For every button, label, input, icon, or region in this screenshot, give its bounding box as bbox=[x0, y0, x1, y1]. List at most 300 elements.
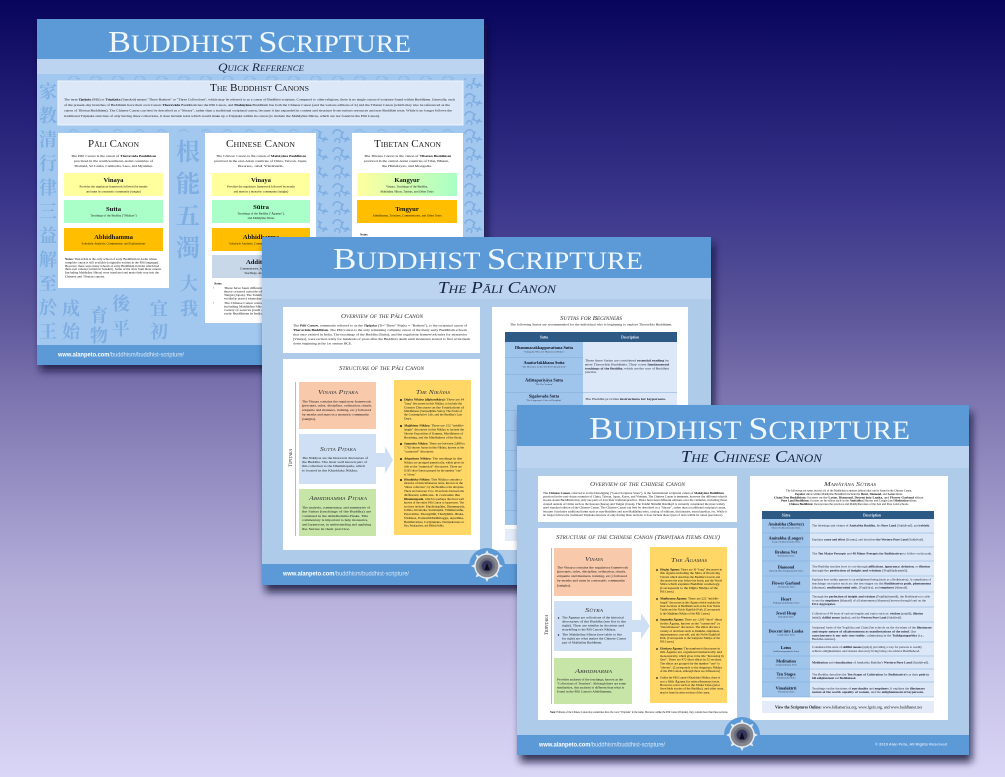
Dirgha Agama: this Āgama including the Sūtra of Practicing bbox=[660, 570, 720, 575]
heading: Chinese Canon bbox=[226, 139, 295, 150]
paragraph: in east-Asian Buddhism may only use parts of it in their tradition/practice. There have been different editions over the centuries, including those bbox=[543, 498, 728, 503]
box: Vinaya Pitaka: Vinaya Piṭaka bbox=[318, 390, 359, 396]
Samyutta Nikaya: Saṃyutta Nikāya: There are between 2,889 to bbox=[404, 442, 465, 446]
box: Kangyur: Kangyur bbox=[394, 177, 420, 184]
watermark: calligraphy columns: 大 bbox=[180, 270, 198, 296]
box: Vinaya: (saṅgha). bbox=[557, 584, 571, 588]
Dirgha Agama: Pāli Canon.) bbox=[660, 590, 674, 594]
box: Additional: Additional bbox=[246, 259, 276, 266]
intro: The following are some, but not all, of the Mahāyāna scriptures (sūtras) that can be found in the Chinese Canon. bbox=[786, 488, 912, 494]
poster: quick reference bbox=[37, 19, 487, 371]
paragraph: used standard edition of the Chinese Canon. The Chinese Canon can best be described as a "library", rather than a traditional scriptural canon, bbox=[543, 506, 726, 510]
table: "The Layperson's Code of Discipline" bbox=[526, 399, 562, 402]
paragraph bbox=[293, 324, 470, 346]
box: Vinaya: Provides the regulatory framework followed by monks bbox=[80, 184, 148, 188]
Samyukta Agama: Saṃyukta Āgama: There are 1,300 "short" sūtras bbox=[660, 616, 723, 622]
Khuddaka Nikaya: Khuddaka Nikāya: This Nikāya contains a bbox=[403, 478, 463, 482]
poster: the Chinese canon bbox=[517, 405, 972, 762]
notes label: Notes: bbox=[360, 232, 368, 236]
row: Diamond bbox=[769, 564, 930, 572]
row: Amitabha shorter: Shorter Sukhāvatīvyūha Sūtra bbox=[772, 527, 801, 530]
notes: complete canon is still available (originally written in the Pāli language). bbox=[65, 260, 159, 264]
notes: widely used standard edition of the canon. bbox=[224, 296, 304, 300]
description: The Tibetan Canon is the canon of Tibetan Buddhism bbox=[364, 154, 452, 158]
box: the Nikayas: The Nikāyas bbox=[416, 390, 450, 396]
Dirgha Agama: discourses the year before his death, and the World bbox=[660, 578, 722, 583]
notes: variety of sources (such as from Buddhist schools of bbox=[224, 308, 305, 312]
row: Diamond: Vajracchedikā Prajñāpāramitā Sūtra bbox=[769, 570, 804, 572]
box: Sutra: right). They are similar in doctrine and bbox=[562, 624, 624, 628]
row: Lotus: Considered the sutra of skillful means (upāya) providing a way for persons to readily bbox=[812, 645, 922, 649]
watermark: calligraphy columns: 始 bbox=[62, 318, 82, 344]
arrow bbox=[376, 446, 393, 474]
intro: Chan/Zen Buddhism: focuses on the Lotus , Diamond , Decent into Lanka , and Flower Garland sūtras. bbox=[774, 495, 924, 500]
paragraph: The Chinese Canon , referred to as the Dazangjing ("Great Scripture Store"), is the foundational scriptural canon of Mahāyāna Buddhism bbox=[543, 491, 724, 496]
Ekottara Agama: this Āgama are organized numerically and bbox=[660, 649, 723, 654]
Khuddaka Nikaya: Niddesa, Paṭisambhidāmagga, Apadāna, bbox=[404, 516, 464, 521]
box: Abhidharma: "Collections of Treatises". Although there are some bbox=[557, 682, 626, 686]
header band bbox=[37, 19, 484, 59]
subtitle band bbox=[37, 59, 484, 74]
box: Sutta Pitaka bbox=[299, 434, 376, 484]
box: Sutra: discourses of the Buddha (see list to the bbox=[562, 620, 627, 624]
Samyukta Agama bbox=[656, 616, 723, 644]
poster: the Pali canon bbox=[262, 237, 714, 592]
footer band bbox=[262, 564, 711, 585]
Majjhima Nikaya: Breathing, and the Mindfulness of the Body. bbox=[404, 436, 462, 440]
watermark: calligraphy columns: 教 bbox=[39, 102, 57, 128]
Khuddaka Nikaya bbox=[400, 478, 465, 528]
intro text bbox=[64, 98, 455, 119]
Digha Nikaya: Mindfulness (Satipaṭṭhāna Sutta), The Fruits of bbox=[404, 409, 463, 414]
paragraph: down beginning in the 1st century BCE. bbox=[293, 342, 352, 346]
description bbox=[71, 154, 157, 169]
box: Sutra: and Mahāyāna Sūtras bbox=[248, 216, 275, 220]
box: Abhidhamma Pitaka: contained in the Abhidhamma Piṭaka. This bbox=[302, 514, 369, 518]
box: the Agamas bbox=[650, 547, 727, 703]
Samyukta Agama: impermanence, non-self, and the Noble Eightfold bbox=[660, 632, 720, 638]
row: Amitabha longer: Amitabha (Longer) bbox=[769, 536, 804, 540]
notes bbox=[65, 257, 162, 278]
box: Sutra: The Āgamas are collections of the historical bbox=[562, 614, 624, 620]
Madhyama Agama: Madhyama Āgama: There are 222 "middle- bbox=[659, 596, 719, 600]
online scriptures box bbox=[762, 701, 934, 713]
notes: The Chinese Canon contains texts from many sources, bbox=[224, 301, 304, 306]
row: Lotus: Saddharmapuṇḍarīka Sūtra bbox=[773, 650, 800, 653]
row: Flower Garland: Explains how reality appears to an enlightened being (such as a Bodhisattva). A compilation of bbox=[812, 578, 932, 582]
row: Vimalakirti: Vimalakīrti Sūtra bbox=[778, 690, 795, 694]
box: Additional: Commentaries, Analysis, Esoteric bbox=[240, 266, 283, 272]
row: Amitabha shorter bbox=[768, 522, 930, 530]
watermark: calligraphy columns: 清 bbox=[39, 126, 57, 152]
row: Jewel Heap: Jewel Heap bbox=[776, 610, 797, 616]
description: the Himalayas, and Mongolia. bbox=[382, 164, 432, 169]
heading: Pāli Canon bbox=[88, 139, 139, 150]
row: Meditation: Meditation and visualization of Amitabha Buddha's Western Pure Land (Sukhāvatī). bbox=[812, 660, 929, 664]
Digha Nikaya bbox=[400, 398, 465, 420]
row: Meditation: Amitāyurdhyāna Sūtra bbox=[775, 664, 798, 666]
row: Meditation bbox=[775, 658, 929, 666]
paragraph: Theravāda Buddhism. The Pāli Canon is the only remaining complete canon of the many early Buddhism schools bbox=[293, 328, 468, 332]
watermark: calligraphy columns: 平 bbox=[112, 315, 130, 341]
row: Descent into Lanka: consciousness is our only true reality , culminating in the Tathāgatagarbha (i.e., bbox=[812, 634, 924, 638]
Khuddaka Nikaya: mixture of miscellaneous texts, known as the bbox=[404, 481, 464, 486]
box: Kangyur bbox=[357, 173, 457, 196]
box: Sutta Pitaka: The Nikāyas are the historical discourses of bbox=[302, 456, 369, 460]
row: Jewel Heap: (māyā), skillful means (upāya), and the Western Pure Land (Sukhāvatī). bbox=[812, 616, 902, 620]
box: the Agamas: The Āgamas bbox=[671, 557, 707, 564]
row: Lotus bbox=[773, 645, 922, 654]
arrow bbox=[632, 613, 650, 639]
row: Amitabha longer: Longer Sukhāvatīvyūha Sūtra bbox=[772, 540, 801, 544]
row: Jewel Heap bbox=[776, 610, 923, 620]
Anguttara Nikaya: title as the "numerical" discourses. There are bbox=[404, 464, 463, 468]
box: Additional: Teachings, and Other Texts bbox=[244, 271, 279, 276]
Khuddaka Nikaya: known of the entire Pāli Canon to laypersons. The bbox=[404, 500, 465, 504]
Digha Nikaya: "long" discourses in this Nikāya, to include the bbox=[404, 401, 463, 406]
Khuddaka Nikaya: Buddhavaṃsa, Cariyāpiṭaka, Nettipakaraṇa or bbox=[404, 520, 464, 525]
row: Heart: Five Aggregates. bbox=[812, 602, 836, 606]
subtitle: The Chinese Canon bbox=[681, 447, 823, 466]
watermark: calligraphy columns: 律 bbox=[39, 174, 57, 200]
panel: structure of the Chinese canon bbox=[538, 528, 737, 720]
box: Sutta Pitaka: is located in the Khuddaka Nikāya. bbox=[302, 468, 358, 472]
box: Vinaya bbox=[212, 173, 310, 196]
paragraph: that once existed in India. The teachings of the Buddha (Sutta), and the regulatory framework/rules for monastics bbox=[293, 332, 468, 338]
box: Sutta Pitaka: this collection is the Dhammapada, which bbox=[302, 464, 365, 469]
heading: Suttas for Beginners bbox=[560, 315, 623, 322]
Anguttara Nikaya: Aṅguttara Nikāya: The teachings in this bbox=[403, 456, 463, 460]
panel: overview of the Pali canon bbox=[283, 307, 480, 353]
notes: those created outside of China such as the Korean bbox=[224, 290, 305, 294]
paragraph: (Vinaya), were recited orally for hundreds of years after the Buddha's death until monastics started to first write them bbox=[293, 337, 470, 342]
box: Sutra: storytelling to the Pāli Canon's Nikāyas. bbox=[562, 628, 616, 632]
heading: Structure of the Pāli Canon bbox=[339, 365, 425, 372]
box: Tengyur: Tengyur bbox=[395, 206, 419, 213]
box: Abhidharma: Scholarly Analysis, Commentary, and Explanations bbox=[229, 242, 294, 246]
watermark: calligraphy columns: 三 bbox=[39, 198, 57, 224]
watermark: calligraphy columns: 物 bbox=[90, 322, 108, 348]
notes: including Mahāyāna Sūtras and other writings, with a bbox=[224, 304, 305, 310]
box: Tengyur: Abhidharma, Treatises, Commentaries, and Other Texts bbox=[373, 214, 442, 218]
note box bbox=[505, 529, 677, 541]
table: These three Suttas are considered essential reading by bbox=[585, 358, 669, 362]
Ekottara Agama: Ekottara Āgama: The numbered discourses in bbox=[659, 646, 720, 650]
Madhyama Agama: Truths and the Noble Eightfold Path. (Corresponds bbox=[660, 608, 721, 612]
Dirgha Agama: (Corresponds to the Dīgha Nikāya of the bbox=[660, 586, 719, 590]
intro: The following Suttas are recommended for the individual who is beginning to explore Theravāda Buddhism. bbox=[510, 322, 672, 326]
watermark: calligraphy columns: 解 bbox=[39, 246, 57, 272]
heading: Overview of the Chinese Canon bbox=[590, 481, 686, 488]
row: Flower Garland bbox=[772, 578, 932, 590]
row: Flower Garland: teachings on topics such as: the ten stages on the Bodhisattva path , phenomena bbox=[812, 582, 931, 586]
panel: the Buddhist canons intro bbox=[58, 81, 463, 125]
row: Flower Garland: Avataṃsaka Sūtra bbox=[777, 586, 796, 588]
footer band bbox=[517, 735, 969, 755]
description: practiced in the east-Asian countries of China, Taiwan, Japan, bbox=[214, 159, 307, 164]
row: Descent into Lanka: Descent into Lanka bbox=[769, 628, 804, 634]
table: Description bbox=[621, 336, 639, 340]
box: Vinaya Pitaka: The Vinaya contains the regulatory framework bbox=[302, 400, 371, 404]
box: Sutra: Sūtra bbox=[585, 608, 604, 614]
Samyukta Agama: Pāli Canon.) bbox=[660, 640, 674, 644]
description: The Pāli Canon is the canon of Theravāda Buddhism bbox=[71, 154, 157, 158]
box: Vinaya bbox=[64, 173, 163, 196]
row: Brahma Net: Brahmajāla Sūtra bbox=[778, 555, 795, 558]
row: Diamond: Diamond bbox=[778, 564, 795, 570]
Ekottara Agama: One". There are 472 short sūtras in 52 sections. bbox=[660, 658, 722, 662]
table: Sutta bbox=[540, 336, 548, 340]
notes: their own canons (written in Sanskrit). Some of the texts from these canons bbox=[65, 267, 162, 271]
paragraph: The Pāli Canon , commonly referred to as the Tipiṭaka (Ti="Three" Piṭaka = "Baskets"), is the scriptural canon of bbox=[293, 324, 468, 328]
notes: However, there were many schools of early Buddhism in India which had bbox=[65, 264, 159, 269]
row: Brahma Net: Brahma Net bbox=[775, 550, 798, 554]
table bbox=[505, 332, 677, 525]
Anguttara Nikaya: 9,565 short Suttas grouped by the number "one" bbox=[404, 468, 463, 474]
footer url: www.alanpeto.com/buddhism/buddhist-scripture/ bbox=[538, 742, 665, 748]
row: Heart bbox=[773, 594, 931, 606]
box: Vinaya: (precepts, rules, discipline, ordination, rituals, bbox=[557, 570, 626, 575]
intro: Pure Land Buddhism: focuses on the sūtras such as the Amitabha (Shorter and Longer) and Meditation sūtras. bbox=[781, 498, 917, 502]
box: Abhidhamma Pitaka: commentary is important to help monastics, bbox=[302, 518, 368, 523]
subtitle band bbox=[262, 278, 711, 299]
header band bbox=[262, 237, 711, 278]
table: practice. bbox=[585, 370, 597, 374]
Other texts note: not a fifth Āgama for miscellaneous texts. bbox=[660, 678, 720, 683]
watermark: calligraphy columns: 行 bbox=[39, 150, 57, 176]
box: Additional bbox=[212, 255, 310, 278]
table: Dhammacakkappavattana Sutta bbox=[515, 345, 574, 350]
table: "Setting the Wheel of Dhamma in Motion" bbox=[523, 350, 565, 354]
box: Vinaya Pitaka bbox=[299, 382, 376, 429]
box: Vinaya Pitaka: etiquette and manners, training, etc.) followed bbox=[302, 408, 371, 413]
watermark: calligraphy columns: 家 bbox=[39, 78, 57, 104]
box: the Nikayas bbox=[394, 380, 471, 535]
row: Heart: to see the emptiness (śūnyatā) of all phenomena (dharmas) known through land on the bbox=[812, 598, 927, 602]
Khuddaka Nikaya: "minor collection", by the Buddha or his disciples. bbox=[404, 485, 464, 490]
row: Descent into Lanka: Buddha-nature). bbox=[812, 637, 836, 641]
row: Brahma Net bbox=[775, 550, 932, 558]
row: Jewel Heap: Collection of 49 texts of various lengths and topics such as: wisdom (prajñā), illusion bbox=[812, 612, 923, 616]
box: Abhidharma: similarities, this analysis is different than what is bbox=[557, 686, 625, 690]
row: Descent into Lanka bbox=[769, 626, 932, 641]
notes bbox=[213, 282, 305, 316]
table: Sigalovada Sutta bbox=[529, 394, 560, 398]
footer url: www.alanpeto.com/buddhism/buddhist-scripture/ bbox=[57, 352, 184, 358]
panel: Tibetan canon bbox=[352, 133, 463, 253]
notes: • bbox=[213, 286, 214, 290]
intro: Popular sūtras within Mahāyāna Buddhism include the Heart, Diamond, and Lotus sūtras. bbox=[795, 492, 903, 497]
table: Mahayana sutras: Sūtra bbox=[782, 514, 790, 518]
description bbox=[214, 154, 307, 169]
paragraph: created outside of China such as the Korean (Karae) and Tangut (Japan). The Taishō Shinshū Daizōkyō is currently considered the most widely bbox=[543, 502, 725, 506]
notes: Notes: Theravāda is the only school of early Buddhism in Asdia whose bbox=[65, 257, 158, 261]
panel: overview of the Chinese canon bbox=[538, 476, 737, 522]
box: Abhidhamma Pitaka: the Suttas (teachings of the Buddha) are bbox=[302, 510, 372, 514]
Ekottara Agama: "eleven". (Corresponds to the Aṅguttara Nikāya bbox=[660, 665, 723, 669]
Ekottara Agama: monotonically, which gives it the title "Increasing by bbox=[660, 654, 724, 659]
box: Vinaya: etiquette and manners, training, etc.) followed bbox=[557, 574, 627, 579]
row: Vimalakirti: Vimalakīrti bbox=[776, 686, 797, 690]
watermark: calligraphy columns: 初 bbox=[150, 318, 168, 344]
description: practiced in the central-Asian countries of Tibet, Bhutan, bbox=[364, 159, 449, 164]
Ekottara Agama bbox=[656, 646, 724, 674]
Tipitaka bracket: Tipiṭaka bbox=[288, 448, 294, 467]
watermark: calligraphy columns: 濁 bbox=[176, 228, 200, 263]
paragraph: because it includes additional items such as non-Buddhist and non-Mahāyāna texts, catalog of editions, dictionaries, encyclopedias, etc. While it bbox=[543, 509, 727, 514]
row: Descent into Lanka: and empty nature of all phenomena as manifestations of the mind. Our bbox=[812, 630, 917, 634]
box: Abhidhamma Pitaka: the Suttas in their practice. bbox=[302, 527, 350, 531]
Majjhima Nikaya: length" discourses in this Nikāya to include the bbox=[404, 428, 465, 432]
row: Descent into Lanka: Laṅkāvatāra Sūtra bbox=[777, 634, 796, 636]
row: Amitabha shorter: Amitabha (Shorter) bbox=[768, 522, 804, 526]
Ekottara Agama: The sūtras are grouped by the number "one" to bbox=[660, 662, 720, 666]
row: Diamond: through the perfection of insight and wisdom (Prajñāpāramitā). bbox=[812, 568, 908, 572]
box: Vinaya: by monks and nuns in a monastic community bbox=[557, 579, 625, 583]
row: Heart: Through the perfection of insight and wisdom (Prajñāpāramitā), the Bodhisattva is able bbox=[812, 594, 931, 600]
intro: Chinese Buddhism: Incorporates the practices and Mahāyāna ideas of the Zen and Pure Land schools. bbox=[789, 502, 909, 506]
box: Sutra bbox=[212, 200, 310, 223]
notes: There have been different editions of the canon, with bbox=[224, 286, 305, 291]
Samyutta Nikaya: "connected" discourses. bbox=[404, 450, 434, 454]
intro text: traditional Tripiṭaka structure of only having three collections, it does include texts which would make up a Tripiṭaka within its canon (to include the Mahāyāna Sūtras, which are not found in the Pāli Canon). bbox=[64, 114, 380, 119]
panel: Mahayana sutras bbox=[750, 476, 948, 720]
row: Amitabha longer bbox=[769, 536, 924, 544]
Majjhima Nikaya: Majjhima Nikāya: There are 152 "middle- bbox=[403, 424, 464, 428]
Majjhima Nikaya bbox=[400, 424, 465, 440]
watermark: calligraphy columns: 五 bbox=[176, 196, 200, 231]
table: Ādittapariyāya Sutta bbox=[525, 378, 564, 382]
box: Abhidharma bbox=[554, 658, 632, 704]
watermark: calligraphy columns: 於 bbox=[39, 294, 57, 320]
box: Vinaya bbox=[554, 548, 632, 596]
watermark: calligraphy columns: 至 bbox=[39, 270, 57, 296]
box: Sutta bbox=[64, 200, 163, 223]
Madhyama Agama bbox=[656, 596, 721, 616]
Khuddaka Nikaya: Peṭa, Peṭakopadesa, and Milinda Pañha. bbox=[404, 524, 444, 528]
intro text: canon of Tibetan Buddhism). The Chinese Canon can best be described as a "library", rather than a traditional scriptural canon, because it has expanded in content and structure from various resources and non-Buddhist texts. While it no longer follows the bbox=[64, 108, 453, 114]
table: teachings of the Buddha , which are the core of Buddhist bbox=[585, 366, 669, 372]
box: Vinaya Pitaka: (precepts, rules, discipline, ordination, rituals, bbox=[302, 404, 372, 408]
box: Abhidhamma Pitaka: and laypersons, in understanding and applying bbox=[302, 522, 371, 528]
panel: Pali canon bbox=[58, 133, 169, 288]
row: Lotus: achieve enlightenment, and stresses that every living being can achieve Buddhahood. bbox=[812, 649, 920, 654]
watermark: calligraphy columns: 能 bbox=[176, 164, 200, 199]
box: Abhidharma: Abhidharma bbox=[574, 669, 613, 675]
wheel emblem bbox=[724, 717, 760, 753]
box: Vinaya: Vinaya bbox=[251, 177, 272, 184]
Anguttara Nikaya: Nikāya are arranged numerically, which gives its bbox=[404, 460, 465, 466]
box: Sutta Pitaka: Sutta Piṭaka bbox=[320, 447, 357, 453]
Khuddaka Nikaya: Dhammapada, which is perhaps the most well bbox=[404, 497, 464, 502]
description: Korea, and Vietnam. bbox=[238, 164, 284, 169]
Majjhima Nikaya: Shorter Exposition of Kamma, Mindfulness of bbox=[404, 432, 464, 436]
row: Ten Stages: Ten Stages bbox=[776, 672, 796, 676]
box: Abhidharma: Provides analysis of the teachings, known as the bbox=[557, 678, 623, 682]
Samyukta Agama: Path. (Corresponds to the Saṃyutta Nikāya of the bbox=[660, 636, 721, 640]
box: Sutra: part of Mahāyāna Buddhism. bbox=[562, 640, 602, 644]
title: BUDDHIST SCRIPTURE bbox=[108, 24, 411, 59]
Digha Nikaya: Greater Discourse on the Foundations of bbox=[404, 405, 465, 409]
wheel emblem bbox=[469, 548, 505, 584]
Madhyama Agama: to the Majjhima Nikāya of the Pāli Canon.) bbox=[660, 612, 710, 616]
panel: Suttas for beginners bbox=[492, 307, 688, 550]
heading: The Buddhist Canons bbox=[210, 83, 309, 94]
notes: • bbox=[213, 301, 214, 305]
watermark: calligraphy columns: 益 bbox=[39, 222, 57, 248]
table: Anatta-lakkhana Sutta bbox=[523, 360, 565, 365]
Other texts note: However, texts such as the Jātaka Tales (prior bbox=[660, 683, 720, 688]
Anguttara Nikaya: to "eleven." bbox=[404, 472, 417, 476]
row: Flower Garland: (dharmas), meditation/mind only, (Yogācāra), and emptiness (śūnyatā). bbox=[812, 586, 908, 590]
table: "The Discourse on the Not-Self Characteristic" bbox=[521, 366, 567, 368]
box: Abhidhamma bbox=[64, 228, 163, 251]
Other texts note bbox=[656, 676, 724, 694]
heading: Mahāyāna Sūtras bbox=[823, 482, 876, 488]
intro text: of the present-day branches of Buddhism have their own Canon: Theravāda Buddhism has the Pāli Canon, and Mahāyāna Buddhism has both the Chinese Canon (and the various editions of it) and the Tibetan Canon (which may also be referenced as the bbox=[64, 103, 451, 108]
Samyutta Nikaya bbox=[400, 442, 465, 454]
watermark: calligraphy columns: 王 bbox=[39, 318, 57, 344]
heading: Structure of the Chinese Canon (Tripiṭaka Items Only) bbox=[556, 534, 720, 541]
heading: Overview of the Pāli Canon bbox=[341, 313, 424, 320]
footer band bbox=[37, 345, 484, 365]
intro bbox=[774, 488, 924, 506]
paragraph bbox=[543, 491, 728, 518]
box: Abhidhamma Pitaka bbox=[299, 489, 376, 536]
table: Mahayana sutras: Description bbox=[863, 514, 881, 518]
notes: Tangut (Japan). The Taishō Shinshū Daizōkyō is the most bbox=[224, 293, 304, 297]
row: Ten Stages bbox=[776, 672, 929, 680]
Madhyama Agama: basic doctrines of Buddhism such as the Four Noble bbox=[660, 604, 721, 608]
box: Abhidharma bbox=[212, 228, 310, 251]
header band bbox=[517, 405, 969, 446]
description: The Chinese Canon is the canon of Mahāyāna Buddhism bbox=[216, 154, 307, 158]
Dirgha Agama: Travels which describes the Buddha's travels and bbox=[660, 575, 720, 579]
notes: early Buddhism in India, China, and Central Asia). bbox=[224, 312, 304, 316]
box: Sutra bbox=[554, 601, 632, 651]
table: Mahayana sutras bbox=[762, 511, 934, 697]
watermark: calligraphy columns bbox=[39, 76, 484, 348]
table: "The Fire Sermon" bbox=[535, 383, 553, 386]
subtitle: The Pāli Canon bbox=[438, 278, 557, 297]
box: Abhidhamma: Abhidhamma bbox=[94, 234, 134, 241]
Dirgha Agama bbox=[656, 567, 722, 594]
row: Flower Garland: Flower Garland bbox=[772, 580, 801, 586]
box: Abhidharma: found in the Pāli Canon's Abhidhamma. bbox=[557, 690, 612, 694]
copyright: © 2019 Alan Peto, All Rights Reserved bbox=[875, 742, 948, 746]
panel: Chinese canon bbox=[205, 133, 316, 323]
box: Sutta Pitaka: the Buddha. The most well known part of bbox=[302, 460, 368, 464]
Khuddaka Nikaya: sections include: Khuddakapāṭha, Dhammapada, bbox=[404, 504, 465, 510]
box: Kangyur: Mahāyāna Sūtras, Tantras, and Other Texts bbox=[380, 190, 434, 194]
box: Sutta: Teachings of the Buddha ("Nikāyas") bbox=[90, 214, 137, 218]
box: Abhidhamma Pitaka: The analysis, commentary, and summaries of bbox=[302, 506, 371, 510]
Other texts note: lives/birth stories of the Buddha), and other texts, bbox=[660, 687, 724, 692]
Samyukta Agama: "miscellaneous" discourses. The sūtras discuss a bbox=[660, 625, 721, 629]
box: Abhidhamma Pitaka: Abhidhamma Piṭaka bbox=[308, 496, 368, 502]
Samyukta Agama: in this Āgama, known as the "connected" or bbox=[660, 620, 720, 626]
box: Abhidharma: Abhidharma bbox=[243, 234, 280, 241]
watermark: calligraphy columns: 我 bbox=[180, 295, 198, 321]
row: Ten Stages: Daśabhūmika Sūtra bbox=[777, 676, 796, 680]
notes: Notes: bbox=[214, 282, 222, 286]
Madhyama Agama: length" discourses in this Āgama which explain the bbox=[660, 600, 721, 604]
Khuddaka Nikaya: There are between 15 to 18 sections between the bbox=[404, 489, 465, 493]
Dirgha Agama: Dīrgha Āgama: There are 30 "long" discourses in bbox=[659, 567, 722, 572]
Samyukta Agama: variety of doctrines such as Dukkha, emptiness, bbox=[660, 629, 720, 634]
description bbox=[364, 154, 452, 169]
notes: Chinese and Tibetan canons. bbox=[65, 274, 105, 278]
